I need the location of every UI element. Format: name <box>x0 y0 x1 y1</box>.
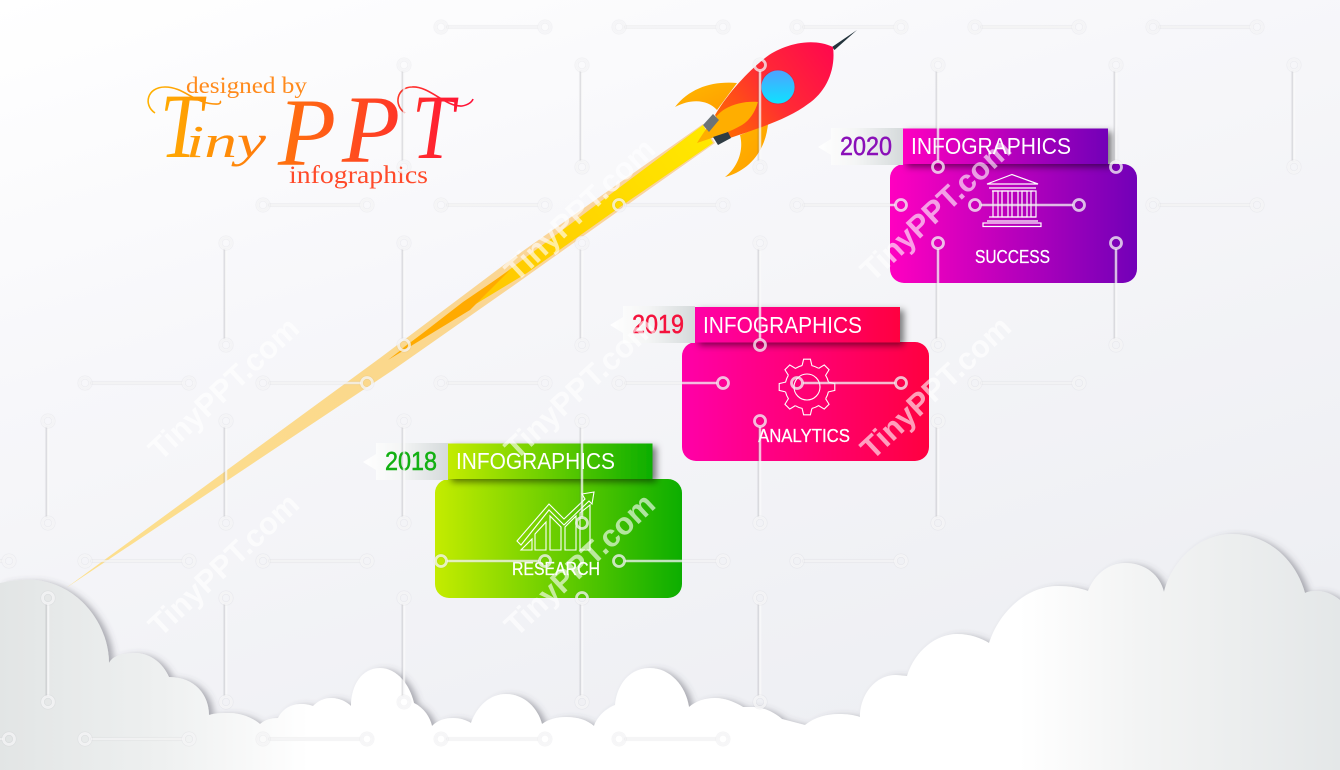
watermarks: TinyPPT.com <box>141 486 306 643</box>
2020 year: 2020 <box>840 131 892 161</box>
rocket window <box>761 70 795 104</box>
rocket exhaust trail <box>66 124 715 588</box>
2018 ribbon heading: INFOGRAPHICS <box>456 448 615 474</box>
panel: 2019 analytics <box>610 306 929 461</box>
2020 year tab <box>818 128 903 165</box>
rocket lower fin <box>725 124 768 177</box>
rocket body <box>715 42 834 138</box>
2019 year tab <box>610 306 695 343</box>
watermarks: TinyPPT.com <box>853 131 1018 288</box>
icon: temple <box>983 174 1041 226</box>
2019 ribbon heading: INFOGRAPHICS <box>703 312 862 338</box>
2020 ribbon <box>903 128 1108 164</box>
2018 card <box>435 479 682 598</box>
rocket centre flame <box>697 102 758 143</box>
logo: designed by TinyPPT infographics: T <box>160 75 207 177</box>
watermarks: TinyPPT.com <box>497 131 662 288</box>
2018 label: RESEARCH <box>512 559 600 579</box>
icon: growth chart <box>517 492 594 550</box>
2020 ribbon heading: INFOGRAPHICS <box>911 133 1071 159</box>
2019 year: 2019 <box>632 309 684 339</box>
2020 card <box>890 164 1137 283</box>
logo: designed by TinyPPT infographics: T <box>412 76 459 178</box>
watermarks: TinyPPT.com <box>497 486 662 643</box>
2019 card <box>682 342 929 461</box>
logo: designed by TinyPPT infographics: iny <box>186 116 267 167</box>
panel: 2020 success <box>818 128 1137 283</box>
rocket upper fin <box>675 83 737 110</box>
rocket dark nozzle <box>713 132 731 145</box>
icon: gear <box>779 359 835 415</box>
watermarks: TinyPPT.com <box>141 310 306 467</box>
logo: designed by TinyPPT infographics: P <box>277 79 336 186</box>
2018 year: 2018 <box>385 446 437 476</box>
logo: designed by TinyPPT infographics: infographics <box>289 162 428 189</box>
logo: designed by TinyPPT infographics: designed by <box>186 73 308 98</box>
logo: designed by TinyPPT infographics: P <box>341 76 400 183</box>
panel: 2018 research <box>363 443 682 598</box>
watermarks <box>141 131 1018 643</box>
2019 ribbon <box>695 307 900 342</box>
2018 ribbon <box>448 444 652 479</box>
logo: designed by TinyPPT infographics <box>148 73 473 189</box>
rocket needle <box>832 30 857 50</box>
rocket grey nozzle <box>703 114 719 132</box>
watermarks: TinyPPT.com <box>497 309 662 466</box>
2019 label: ANALYTICS <box>758 426 850 446</box>
rocket <box>675 30 857 177</box>
clouds <box>0 534 1340 770</box>
2020 label: SUCCESS <box>975 247 1050 267</box>
2018 year tab <box>363 443 448 480</box>
watermarks: TinyPPT.com <box>853 309 1018 466</box>
